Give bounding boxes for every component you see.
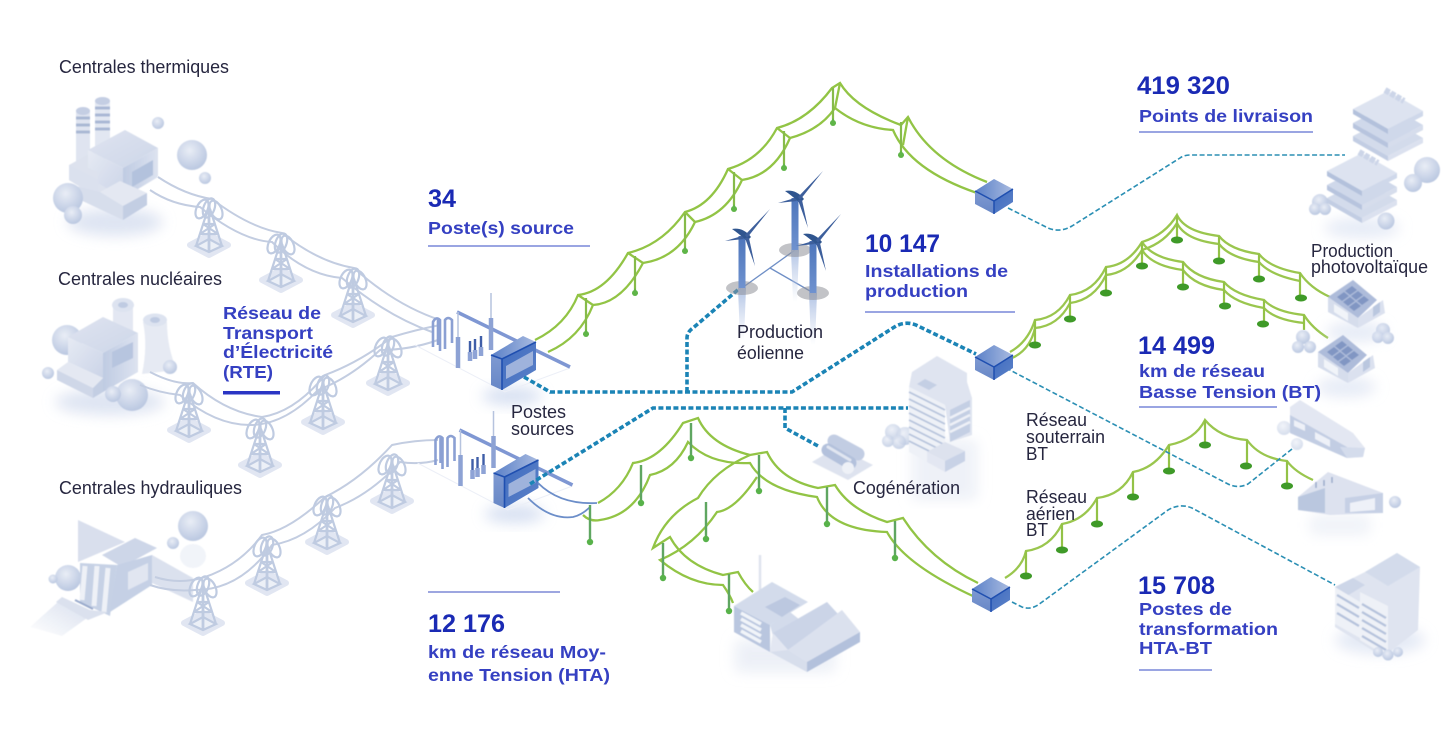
cogénération [812,441,873,480]
lignes haute tension [140,177,440,590]
réseau souterrain pointillé épais [524,288,976,484]
central thermique [53,97,211,236]
bloc: Réseau de Transport d'Électricité: d’Électricité [223,341,333,362]
chiffre: installations de production: 10 147 [865,230,940,258]
chiffre: postes sources: 34 [428,185,456,213]
chiffre: réseau moyenne tension: enne Tension (HTA) [428,665,610,685]
libellé: réseau souterrain BT [1026,410,1105,464]
chiffre: installations de production: Installations de [865,261,1008,281]
libellé: production éolienne: Production [737,322,823,342]
central nucléaire [42,298,177,415]
réseau aérien basse tension bas [1005,420,1313,580]
chiffre: postes de transformation: 15 708 [1138,572,1215,600]
libellé: réseau aérien BT: Réseau [1026,487,1087,507]
libellé: réseau souterrain BT: BT [1026,444,1048,464]
libellé: réseau aérien BT: aérien [1026,504,1075,524]
libellé: réseau souterrain BT: souterrain [1026,427,1105,447]
points de livraison [1309,90,1440,238]
chiffre: points de livraison: Points de livraison [1139,106,1313,126]
libellé: réseau aérien BT [1026,487,1087,540]
chiffre: réseau moyenne tension: km de réseau Moy- [428,642,606,662]
immeuble [882,356,977,500]
libellé: centrales nucléaires: Centrales nucléaires [58,269,222,289]
libellé: production éolienne: éolienne [737,343,804,363]
bloc: Réseau de Transport d'Électricité: Réseau de [223,303,321,323]
chiffre: réseau basse tension: Basse Tension (BT) [1139,382,1321,402]
poste source bas [418,411,572,523]
chiffre: points de livraison [1137,72,1313,132]
libellé: postes sources: sources [511,419,574,439]
libellé: production photovoltaïque: photovoltaïque [1311,257,1428,277]
chiffre: réseau moyenne tension: 12 176 [428,610,505,638]
bloc: Réseau de Transport d'Électricité: Transport [223,323,313,343]
maisons [1277,400,1401,535]
chiffre: postes de transformation: transformation [1139,619,1278,639]
chiffre: postes sources [428,185,590,246]
libellé: postes sources: Postes [511,402,566,422]
immeubles résidentiels [1335,553,1425,660]
libellé: centrales hydrauliques: Centrales hydrauliques [59,478,242,498]
chiffre: réseau basse tension [1138,332,1321,407]
chiffre: points de livraison: 419 320 [1137,72,1230,100]
chiffre: réseau basse tension: 14 499 [1138,332,1215,360]
pylônes haute tension [170,197,411,633]
bloc: Réseau de Transport d'Électricité: (RTE) [223,362,273,382]
réseau souterrain pointillé fin [1006,155,1345,608]
libellé: production photovoltaïque: Production [1311,241,1393,261]
chiffre: postes sources: Poste(s) source [428,218,574,238]
chiffre: postes de transformation [1138,572,1278,670]
chiffre: postes de transformation: HTA-BT [1139,638,1212,658]
bâtiment industriel [734,555,860,672]
chiffre: postes de transformation: Postes de [1139,599,1232,619]
chiffre: réseau basse tension: km de réseau [1139,361,1265,381]
libellé: production photovoltaïque [1311,241,1428,277]
lignes moyenne tension haut [535,83,987,352]
réseau aérien basse tension haut [1010,215,1330,358]
chiffre: installations de production: production [865,281,968,301]
libellé: réseau aérien BT: BT [1026,520,1048,540]
chiffre: réseau moyenne tension [428,592,610,685]
poste source haut [415,293,570,405]
libellé: production éolienne [737,322,823,363]
libellé: centrales thermiques: Centrales thermiques [59,57,229,77]
bloc: Réseau de Transport d'Électricité [223,303,333,394]
chiffre: installations de production [865,230,1015,312]
lignes moyenne tension bas [528,418,978,614]
transformateurs HTA-BT [972,179,1013,612]
maisons photovoltaïques [1292,280,1394,397]
central hydraulique [30,511,208,636]
éoliennes [725,171,841,345]
libellé: cogénération: Cogénération [853,478,960,498]
libellé: postes sources [511,402,574,439]
libellé: réseau souterrain BT: Réseau [1026,410,1087,430]
